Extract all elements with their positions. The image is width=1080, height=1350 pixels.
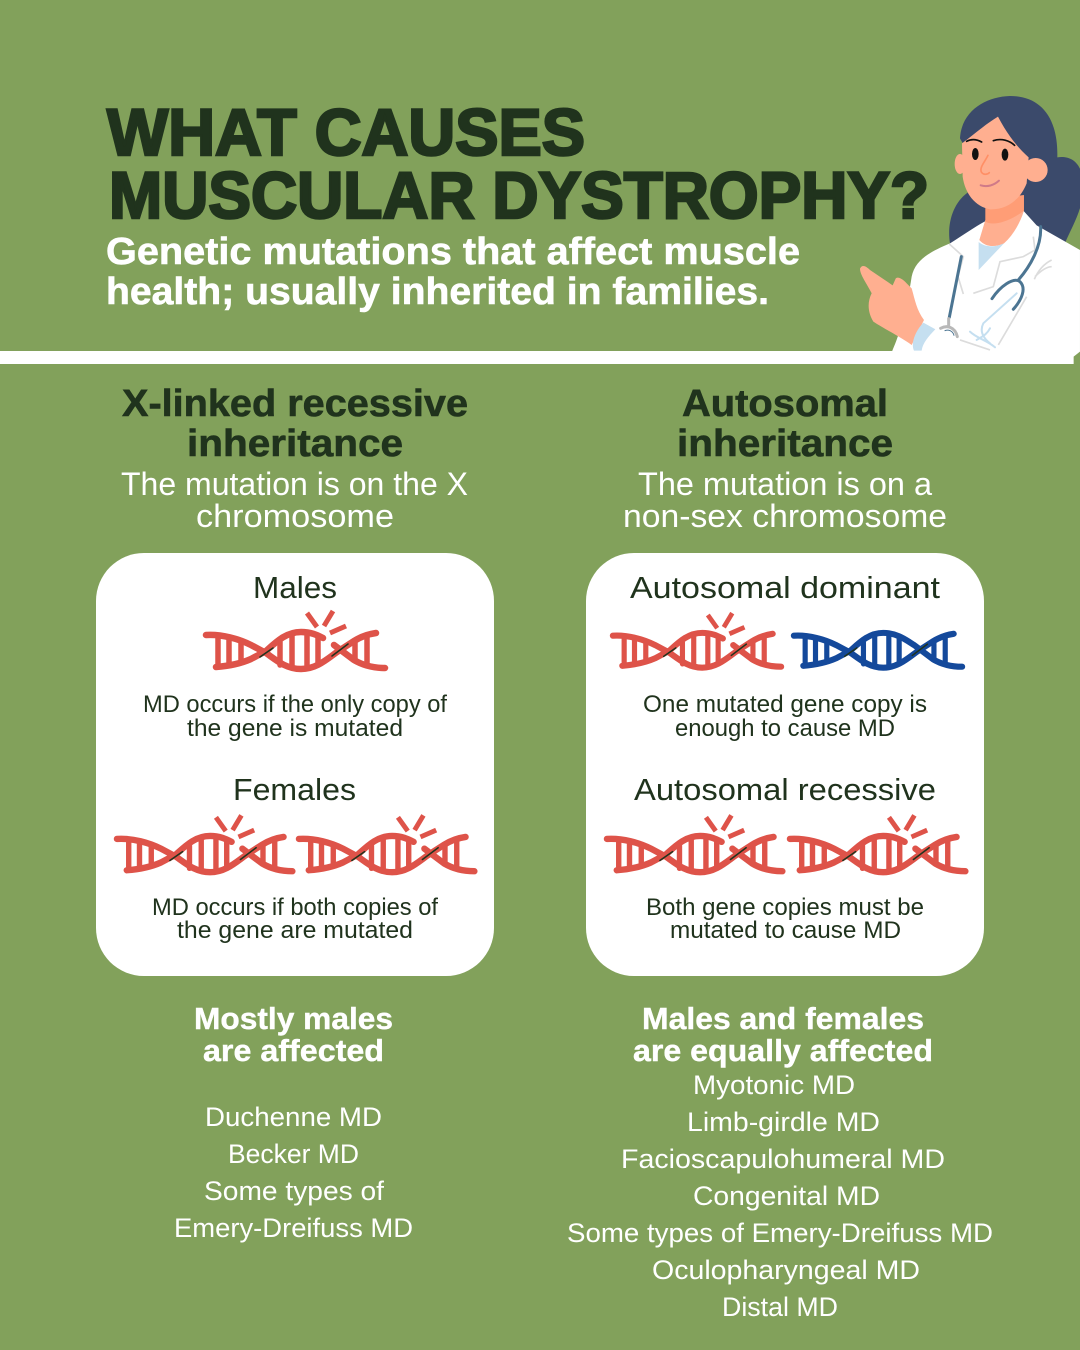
doctor undershirt bbox=[979, 242, 1004, 270]
right column description bbox=[623, 466, 947, 534]
males description: MD occurs if the only copy of bbox=[143, 691, 447, 718]
left column heading: X-linked recessive bbox=[122, 383, 468, 425]
right column description: non-sex chromosome bbox=[623, 498, 947, 534]
doctor brows and eyes bbox=[967, 140, 1015, 161]
stethoscope bbox=[941, 227, 1041, 347]
title bbox=[107, 95, 929, 232]
doctor neck bbox=[985, 195, 1024, 223]
panel: autosomal card bbox=[586, 553, 984, 976]
icons: two mutated dna bbox=[607, 815, 965, 872]
right column description: The mutation is on a bbox=[638, 466, 932, 502]
autosomal dominant heading: Autosomal dominant bbox=[630, 570, 940, 605]
left list of types: Becker MD bbox=[228, 1139, 359, 1169]
males heading: Males bbox=[253, 570, 337, 605]
doctor sleeve cuff bbox=[913, 323, 935, 351]
right list of types bbox=[567, 1070, 993, 1322]
title: WHAT CAUSES bbox=[107, 95, 585, 169]
right list of types: Some types of Emery-Dreifuss MD bbox=[567, 1218, 993, 1248]
males description: the gene is mutated bbox=[187, 715, 403, 742]
right affected heading: Males and females bbox=[642, 1001, 924, 1036]
autosomal recessive description bbox=[646, 894, 924, 944]
females description bbox=[152, 894, 438, 944]
header divider band bbox=[0, 351, 1073, 364]
autosomal recessive description: mutated to cause MD bbox=[670, 917, 901, 944]
left list of types: Emery-Dreifuss MD bbox=[174, 1213, 413, 1243]
females heading: Females bbox=[233, 772, 356, 807]
right list of types: Limb-girdle MD bbox=[687, 1107, 880, 1137]
left column heading: inheritance bbox=[187, 423, 403, 465]
left affected heading bbox=[194, 1001, 393, 1068]
right list of types: Distal MD bbox=[722, 1292, 838, 1322]
left list of types bbox=[174, 1102, 413, 1243]
doctor face bbox=[962, 117, 1029, 209]
females description: MD occurs if both copies of bbox=[152, 894, 438, 921]
left list of types: Some types of bbox=[204, 1176, 385, 1206]
right list of types: Congenital MD bbox=[693, 1181, 880, 1211]
right affected heading bbox=[633, 1001, 933, 1068]
autosomal dominant description: One mutated gene copy is bbox=[643, 691, 927, 718]
right column heading: inheritance bbox=[677, 423, 893, 465]
left column description: The mutation is on the X bbox=[121, 466, 468, 502]
left column description: chromosome bbox=[196, 498, 394, 534]
left affected heading: Mostly males bbox=[194, 1001, 393, 1036]
title: MUSCULAR DYSTROPHY? bbox=[109, 158, 929, 232]
doctor hand pointing bbox=[860, 266, 924, 345]
autosomal recessive heading: Autosomal recessive bbox=[634, 772, 936, 807]
right list of types: Facioscapulohumeral MD bbox=[621, 1144, 945, 1174]
subtitle: health; usually inherited in families. bbox=[106, 271, 769, 313]
autosomal dominant description bbox=[643, 691, 927, 742]
doctor nose and mouth bbox=[981, 155, 999, 186]
right column heading: Autosomal bbox=[682, 383, 888, 425]
left column heading bbox=[122, 383, 468, 465]
left column description bbox=[121, 466, 468, 534]
right column heading bbox=[677, 383, 893, 465]
icon: mutated dna male bbox=[206, 611, 385, 669]
doctor hair back bbox=[949, 96, 1080, 243]
illustration: doctor pointing bbox=[860, 96, 1080, 364]
left list of types: Duchenne MD bbox=[205, 1102, 382, 1132]
doctor lab coat bbox=[892, 211, 1080, 364]
icons: mutated and healthy dna bbox=[613, 613, 962, 668]
icons: mutated dna females bbox=[117, 815, 474, 872]
autosomal dominant description: enough to cause MD bbox=[675, 715, 895, 742]
right affected heading: are equally affected bbox=[633, 1033, 933, 1068]
right list of types: Myotonic MD bbox=[693, 1070, 855, 1100]
doctor coat folds bbox=[949, 237, 1052, 350]
subtitle bbox=[106, 231, 800, 313]
subtitle: Genetic mutations that affect muscle bbox=[106, 231, 800, 273]
right list of types: Oculopharyngeal MD bbox=[652, 1255, 920, 1285]
autosomal recessive description: Both gene copies must be bbox=[646, 894, 924, 921]
left affected heading: are affected bbox=[203, 1033, 384, 1068]
females description: the gene are mutated bbox=[177, 917, 413, 944]
panel: x-linked card bbox=[96, 553, 494, 976]
doctor ear right bbox=[1024, 158, 1048, 182]
males description bbox=[143, 691, 447, 742]
doctor ear left bbox=[955, 154, 965, 174]
doctor chest skin bbox=[979, 211, 1024, 246]
